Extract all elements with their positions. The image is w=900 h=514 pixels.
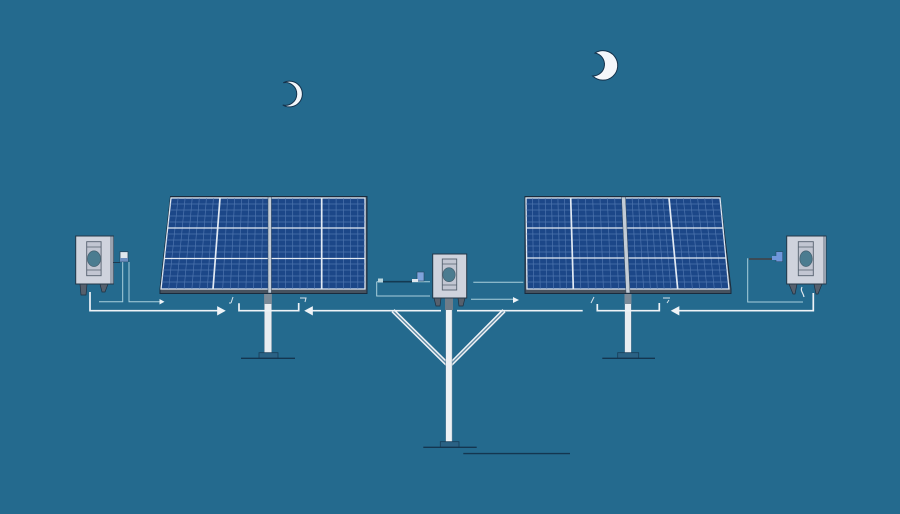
wire under right array bbox=[597, 303, 659, 311]
icon: large crescent moon bbox=[593, 51, 618, 80]
left inverter box bbox=[76, 236, 113, 295]
left connector box bbox=[113, 252, 128, 262]
thin signal wiring bbox=[99, 258, 803, 304]
wire under left array bbox=[239, 303, 299, 311]
illustration: solar panel array at night bbox=[75, 50, 826, 454]
main wiring with arrows bbox=[90, 292, 813, 314]
icon: small crescent moon bbox=[283, 81, 302, 107]
right solar array pole bbox=[602, 294, 655, 358]
left solar array pole bbox=[241, 294, 295, 358]
right connector bbox=[749, 252, 783, 262]
right solar panel array bbox=[520, 196, 735, 294]
wire through centre bbox=[306, 308, 583, 314]
small wire details under arrays bbox=[229, 297, 670, 303]
centre connector bbox=[378, 272, 424, 282]
right main wire bbox=[672, 293, 813, 314]
left main wire bbox=[90, 292, 224, 314]
central support pole with braces bbox=[393, 308, 570, 454]
right inverter box bbox=[787, 236, 826, 297]
centre inverter box bbox=[433, 254, 467, 310]
left solar panel array bbox=[160, 196, 367, 294]
